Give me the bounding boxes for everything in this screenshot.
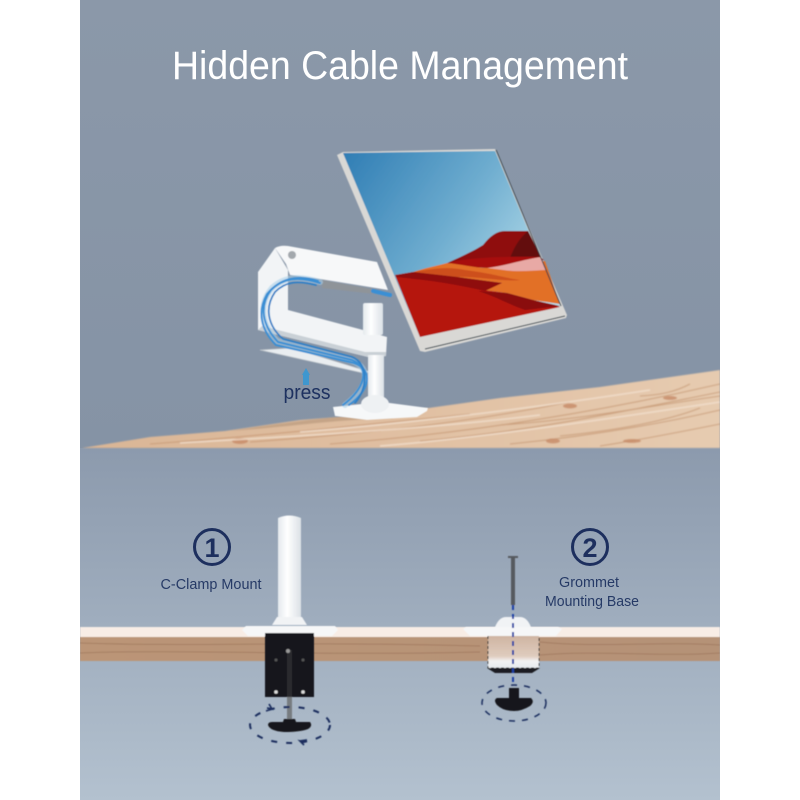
arm: pivot knob [288, 251, 296, 259]
monitor screen [343, 151, 560, 337]
panel: bottom background [80, 448, 720, 800]
arm: lower link shadow [258, 326, 386, 358]
arm: upper link [275, 246, 388, 290]
grommet: desk hole [488, 634, 539, 668]
clamp: knob [268, 719, 311, 732]
arm: desk base [333, 402, 428, 420]
step 2: label: Mounting Base [545, 593, 639, 610]
press label: press [284, 382, 330, 404]
arm: lower pole [368, 355, 384, 403]
blue cables [261, 278, 390, 405]
grommet: knob [495, 688, 533, 711]
grommet: rotation dashes [482, 685, 546, 721]
step 2: label [545, 574, 639, 610]
arm: top of pole [363, 303, 383, 335]
side margin: right [720, 0, 800, 800]
screen landscape [395, 150, 565, 349]
clamp: pole flange [272, 617, 307, 625]
press arrow [302, 368, 310, 385]
step 2: label: Grommet [559, 574, 620, 591]
monitor frame [337, 149, 567, 352]
panel: top background [80, 0, 720, 448]
clamp: white base plate [242, 626, 338, 636]
title: Hidden Cable Management [172, 44, 628, 88]
monitor [337, 149, 567, 352]
grommet: lower disc [487, 668, 540, 673]
desk surface: top panel [82, 370, 720, 448]
clamp: white pole [278, 516, 301, 619]
step 1: label: C-Clamp Mount [160, 576, 262, 593]
C-clamp mount [242, 516, 338, 745]
clamp: black bracket [265, 633, 314, 697]
clamp: rotation dashes [250, 707, 330, 743]
monitor arm [258, 246, 428, 420]
clamp: rotation arrows [266, 704, 307, 745]
arm: base ball joint [361, 395, 389, 413]
side margin: left [0, 0, 80, 800]
clamp: threaded rod [287, 697, 292, 719]
grommet mount [463, 556, 562, 721]
step 1: number badge: 1 [204, 533, 220, 563]
arm: lower link [258, 248, 387, 358]
arm: gas spring cover [322, 280, 374, 294]
grommet: dome [495, 617, 531, 627]
grommet: white base plate [463, 627, 562, 636]
clamp: bracket details [274, 649, 305, 697]
step 1: number badge [194, 530, 230, 564]
step 2: number badge [572, 530, 608, 564]
step 2: number badge: 2 [582, 533, 598, 563]
grommet: bolt [508, 556, 518, 605]
panel: desk cross-section [80, 627, 720, 661]
grommet: alignment line [512, 605, 514, 686]
arm: cable cover plate [260, 348, 370, 373]
